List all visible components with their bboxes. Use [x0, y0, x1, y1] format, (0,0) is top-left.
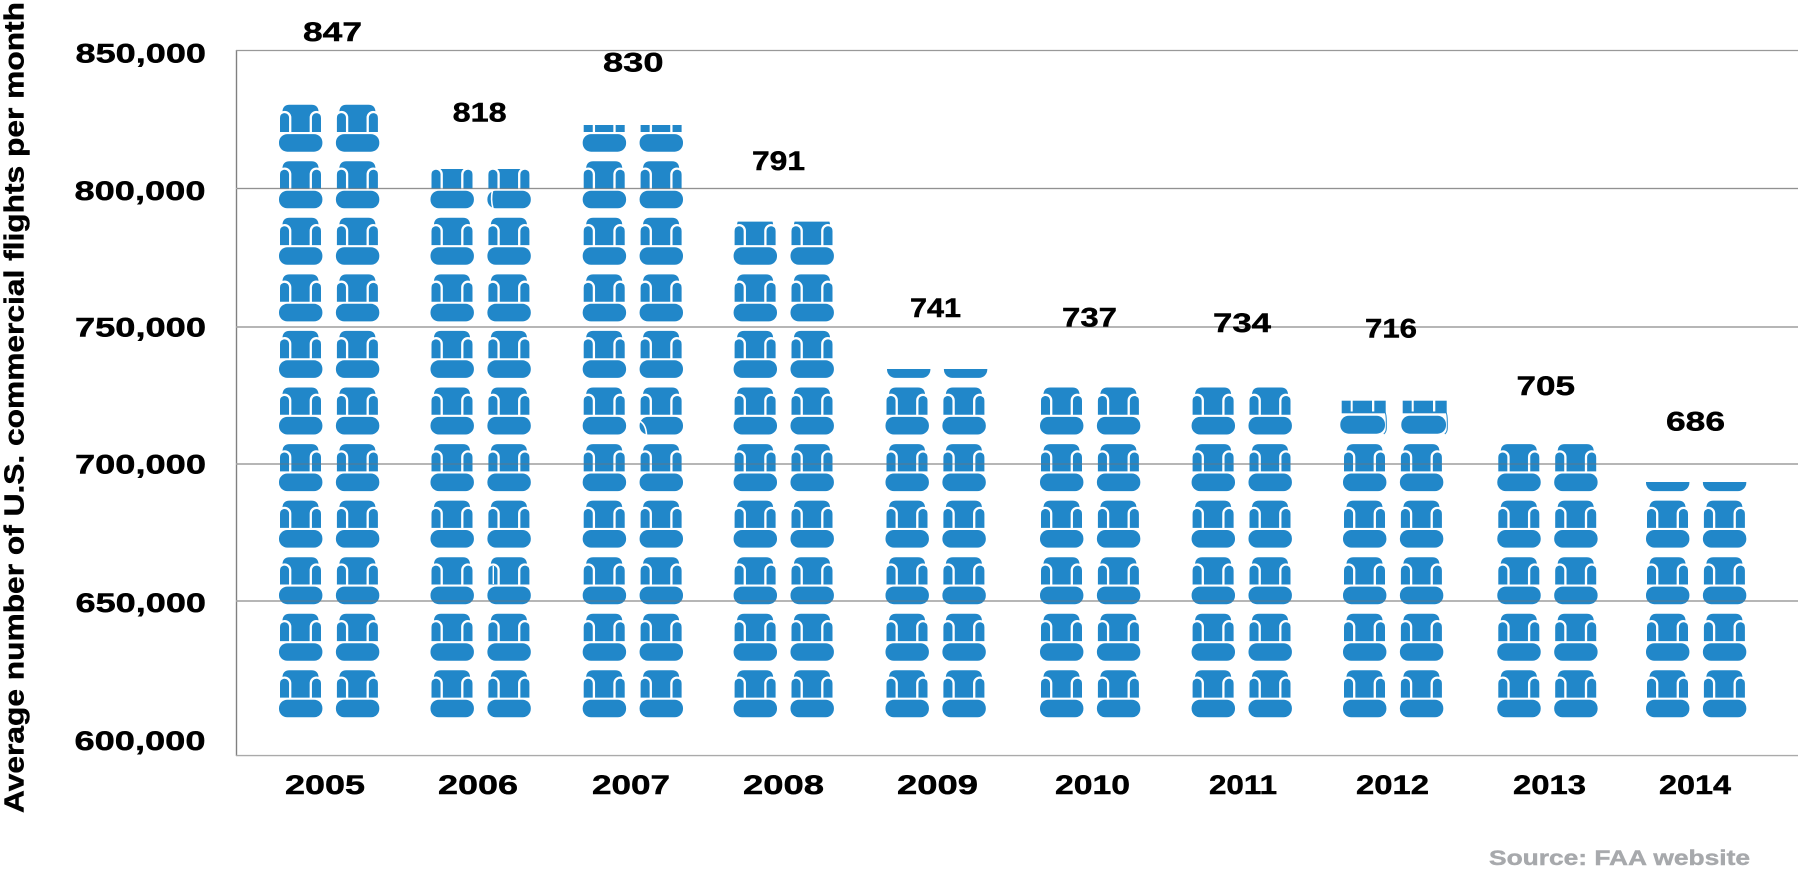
- x-axis year labels: 2010: [1055, 770, 1130, 800]
- seat column: 2013: [1497, 444, 1598, 717]
- x-axis year labels: 2005: [285, 770, 365, 800]
- value labels above columns: 686: [1666, 407, 1725, 437]
- value labels above columns: 737: [1062, 302, 1117, 332]
- value labels above columns: 830: [603, 48, 664, 78]
- value labels above columns: 716: [1365, 314, 1417, 344]
- value labels above columns: 741: [910, 293, 961, 323]
- value labels above columns: 791: [752, 146, 805, 176]
- seat column: 2012: [1340, 400, 1447, 717]
- x-axis year labels: 2006: [438, 770, 518, 800]
- x-axis year labels: 2013: [1513, 770, 1586, 800]
- gridline overlay: [237, 188, 1798, 601]
- y-axis tick labels: [74, 39, 206, 756]
- x-axis year labels: [285, 770, 1731, 800]
- value labels above columns: 847: [303, 17, 362, 47]
- gridlines and axes: [236, 50, 1798, 756]
- seat column: 2005: [279, 105, 379, 717]
- x-axis year labels: 2007: [592, 770, 670, 800]
- x-axis year labels: 2011: [1209, 770, 1277, 800]
- x-axis year labels: 2008: [743, 770, 824, 800]
- x-axis year labels: 2014: [1659, 770, 1731, 800]
- value labels above columns: 705: [1516, 371, 1575, 401]
- seat column: 2008: [734, 218, 834, 717]
- y-axis tick labels: 600,000: [74, 726, 206, 756]
- seat column: 2011: [1192, 388, 1292, 717]
- x-axis year labels: 2012: [1356, 770, 1429, 800]
- seat column: 2010: [1040, 388, 1140, 717]
- y-axis tick labels: 850,000: [76, 39, 206, 69]
- source note: Source: FAA website: [1489, 846, 1750, 870]
- y-axis tick labels: 800,000: [74, 176, 206, 206]
- seat column: 2006: [430, 161, 531, 717]
- y-axis tick labels: 650,000: [76, 588, 206, 618]
- value labels above columns: 734: [1213, 308, 1271, 338]
- y-axis tick labels: 750,000: [75, 312, 206, 342]
- x-axis year labels: 2009: [897, 770, 978, 800]
- y-axis tick labels: 700,000: [75, 450, 206, 480]
- value labels above columns: [303, 17, 1725, 437]
- value labels above columns: 818: [453, 98, 507, 128]
- seat column: 2009: [886, 331, 987, 717]
- seat column: 2014: [1646, 482, 1746, 718]
- seat column: 2007: [583, 105, 683, 717]
